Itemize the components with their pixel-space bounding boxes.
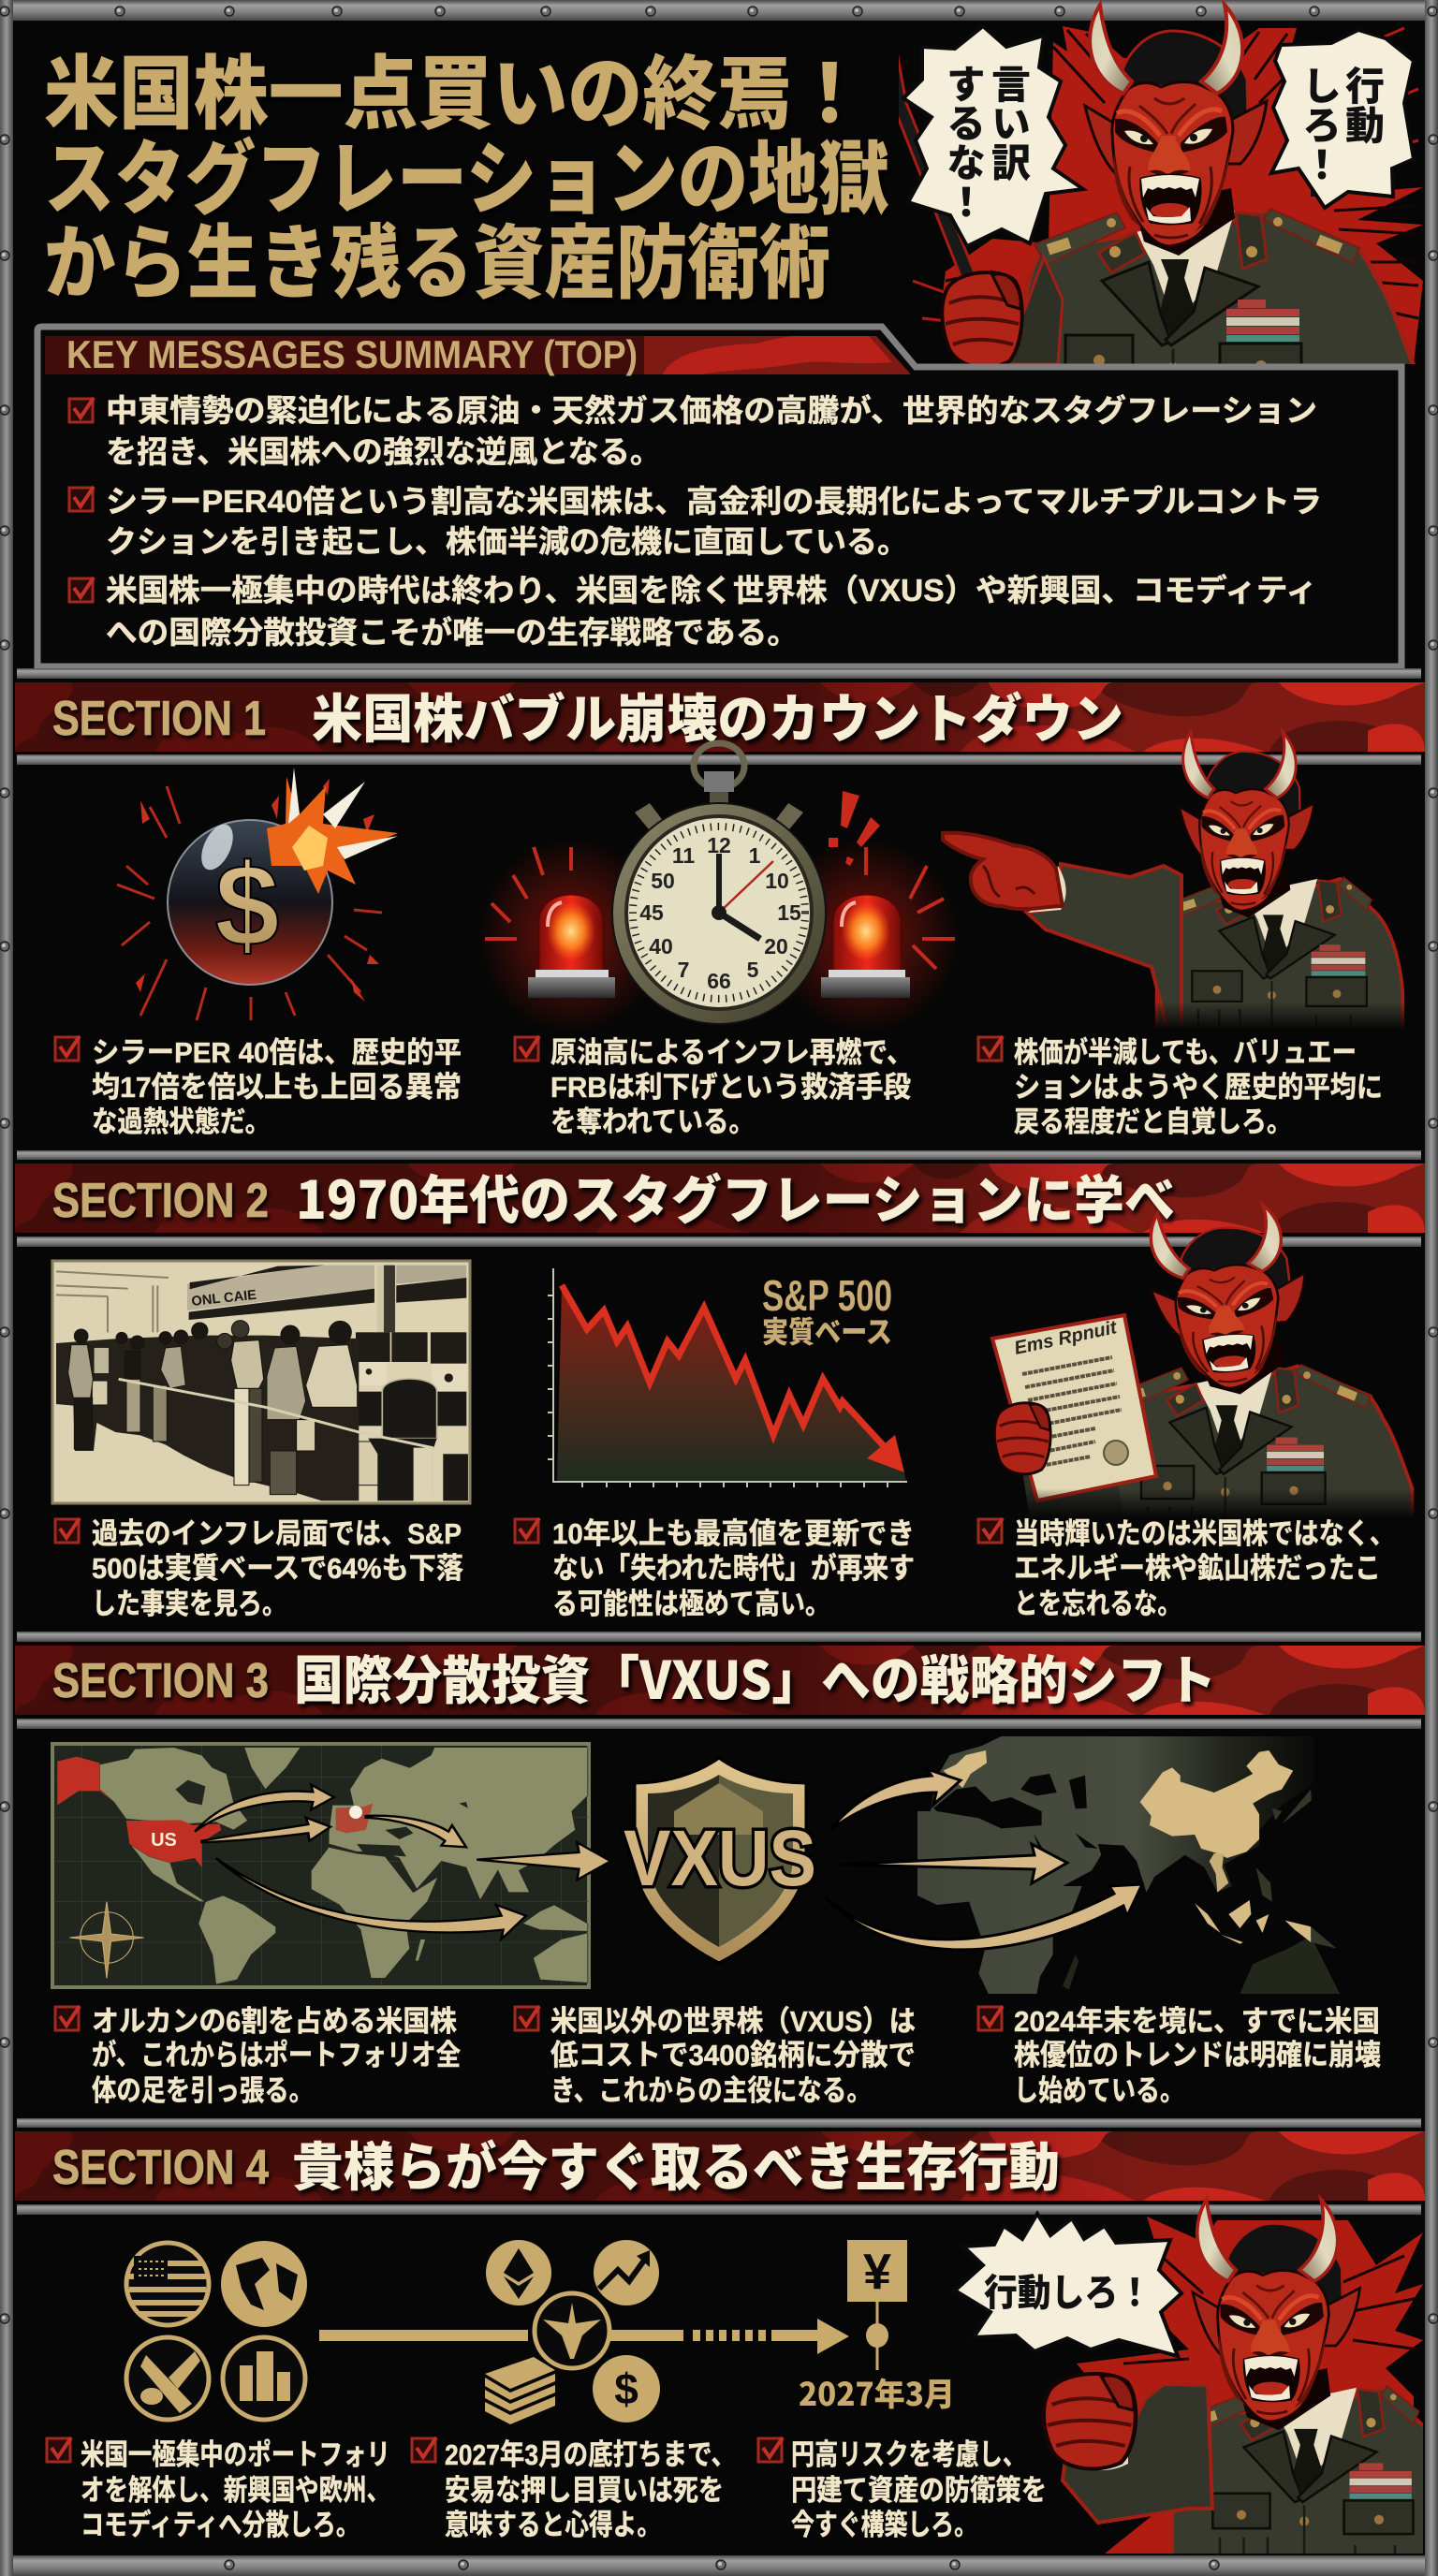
- bullet: shiller: 均17倍を倍以上も上回る異常: [92, 1071, 462, 1104]
- bullet: yen risk: [758, 2437, 1047, 2541]
- section 4 header: SECTION 4: [52, 2141, 269, 2195]
- bullet: break concentration: 米国一極集中のポートフォリ: [81, 2438, 390, 2471]
- bullet: lost era: [515, 1517, 915, 1620]
- section 2 header: 1970年代のスタグフレーションに学べ: [296, 1159, 1175, 1235]
- seas: [917, 1736, 1098, 1855]
- hands: [719, 861, 773, 913]
- seas: [175, 1780, 468, 1856]
- bullet: break concentration: コモディティへ分散しろ。: [81, 2509, 360, 2541]
- red burst: [941, 26, 1423, 364]
- section 2 header: [15, 1150, 1425, 1247]
- icon: cash stack: [485, 2357, 555, 2424]
- bullet: valuation: 戻る程度だと自覚しろ。: [1014, 1105, 1292, 1138]
- continents: [99, 1748, 588, 1984]
- bullet: all-country: 体の足を引っ張る。: [92, 2074, 314, 2107]
- VXUS shield: [624, 1758, 816, 1963]
- rope barrier: [118, 1378, 434, 1448]
- pump counter: [353, 1332, 468, 1500]
- title: スタグフレーションの地獄: [44, 113, 889, 230]
- bullet: VXUS: [515, 2005, 916, 2107]
- summary heading tab: KEY MESSAGES SUMMARY (TOP): [66, 332, 638, 376]
- bottom fade: [1026, 1489, 1414, 1518]
- dial numbers: 12: [707, 833, 731, 857]
- title: [44, 28, 889, 315]
- bullet: 2024 trend: 2024年末を境に、すでに米国: [1014, 2005, 1380, 2038]
- message 3: への国際分散投資こそが唯一の生存戦略である。: [106, 615, 799, 650]
- icon: buildings: [223, 2337, 305, 2420]
- bullet: all-country: が、これからはポートフォリオ全: [92, 2039, 461, 2071]
- section 4 bullet texts: [47, 2437, 1047, 2541]
- bullet: valuation: 株価が半減しても、バリュエー: [1014, 1036, 1357, 1069]
- icon: central hub: [535, 2293, 609, 2368]
- bullet: 64 percent: した事実を見ろ。: [92, 1588, 286, 1620]
- message 3: [69, 573, 1317, 650]
- station signage: ONL CAIE: [191, 1288, 257, 1310]
- dial numbers: 45: [639, 900, 664, 925]
- title: から生き残る資産防衛術: [44, 198, 830, 315]
- dial numbers: [639, 833, 801, 993]
- devil pointing: [941, 727, 1404, 1028]
- bullet: VXUS: 低コストで3400銘柄に分散で: [550, 2039, 916, 2071]
- bullet: lost era: る可能性は極めて高い。: [552, 1588, 830, 1620]
- bullet: valuation: [978, 1036, 1383, 1138]
- bullet: lost era: ない「失われた時代」が再来す: [552, 1552, 915, 1585]
- icon: yen marker with date: ¥: [863, 2244, 891, 2300]
- bullet: bottom in March 2027: 2027年3月の底打ちまで、: [445, 2438, 736, 2471]
- speech bubble: act: 行動: [1337, 66, 1393, 144]
- bullet: 64 percent: 過去のインフレ局面では、S&P: [92, 1517, 462, 1550]
- siren right: [772, 838, 960, 1034]
- dial numbers: 15: [777, 900, 801, 925]
- land: [917, 1736, 1314, 1994]
- document: [992, 1315, 1156, 1500]
- bullet: energy stocks: [978, 1517, 1395, 1620]
- devil figure: [1022, 0, 1416, 364]
- bullet: yen risk: 円建て資産の防衛策を: [791, 2474, 1047, 2507]
- devil commander with baton: [899, 0, 1423, 364]
- photo: 1970s gas queue: [52, 1261, 470, 1503]
- arrow head: [867, 1435, 904, 1472]
- bullet: 2024 trend: し始めている。: [1014, 2074, 1184, 2107]
- icon: tools: [126, 2337, 209, 2420]
- document: Ems Rpnuit: [1012, 1317, 1120, 1359]
- section 1 header: 米国株バブル崩壊のカウントダウン: [312, 678, 1123, 754]
- bullet: all-country: [55, 2005, 461, 2107]
- bullet: yen risk: 今すぐ構築しろ。: [791, 2509, 977, 2541]
- devil with document: [990, 1200, 1414, 1516]
- fist: [942, 272, 1022, 367]
- icon group: diversification hub: [485, 2240, 660, 2424]
- dial numbers: 50: [651, 869, 675, 893]
- dial numbers: 11: [672, 843, 695, 868]
- US highlighted: [57, 1757, 373, 1867]
- bullet: break concentration: オを解体し、新興国や欧州、: [81, 2474, 390, 2507]
- timeline arrow: [319, 2319, 849, 2354]
- icon: dollar coin: $: [614, 2364, 638, 2413]
- section 2 bullet texts: [55, 1517, 1395, 1620]
- dial numbers: 10: [765, 869, 789, 893]
- chart label: [762, 1271, 892, 1352]
- chart label: 実質ベース: [762, 1309, 892, 1352]
- message 2: クションを引き起こし、株価半減の危機に直面している。: [106, 524, 908, 559]
- speech bubble: act: しろ！: [1294, 66, 1350, 183]
- chart: S&P 500 real decline: [548, 1268, 907, 1487]
- section 3 header: SECTION 3: [52, 1654, 269, 1708]
- message 2: シラーPER40倍という割高な米国株は、高金利の長期化によってマルチプルコントラ: [106, 484, 1322, 519]
- dark Asia map: [917, 1736, 1340, 1994]
- queue of people: [68, 1321, 358, 1495]
- bullet: bottom in March 2027: 安易な押し目買いは死を: [445, 2474, 724, 2507]
- bullet: 64 percent: 500は実質ベースで64%も下落: [92, 1552, 463, 1585]
- icon: growth chart: [594, 2240, 659, 2305]
- watch case: [694, 743, 744, 788]
- raised fist: [1044, 2374, 1136, 2468]
- bullet: energy stocks: とを忘れるな。: [1014, 1588, 1181, 1620]
- exclamation marks: [829, 791, 880, 866]
- bullet: shiller: な過熱状態だ。: [92, 1105, 271, 1138]
- icon: globe: [223, 2243, 305, 2325]
- bullet: FRB: を奪われている。: [550, 1105, 755, 1138]
- message 1: 中東情勢の緊迫化による原油・天然ガス価格の高騰が、世界的なスタグフレーション: [106, 393, 1317, 428]
- map: world from US: US: [151, 1830, 177, 1851]
- devil with fist and shout: [1044, 2200, 1438, 2576]
- VXUS shield: VXUS: [624, 1814, 816, 1902]
- section 1 header: [15, 668, 1425, 765]
- chart label: S&P 500: [762, 1271, 892, 1320]
- sleeve: [1004, 257, 1063, 364]
- bullet: FRB: 原油高によるインフレ再燃で、: [550, 1036, 913, 1069]
- icon: dollar coin: [593, 2355, 660, 2422]
- bullet: FRB: FRBは利下げという救済手段: [550, 1071, 911, 1104]
- title: 米国株一点買いの終焉！: [44, 28, 867, 145]
- icon: dollar bubble bursting: [117, 768, 398, 1020]
- dial numbers: 1: [749, 843, 761, 868]
- bullet: energy stocks: 当時輝いたのは米国株ではなく、: [1014, 1517, 1395, 1550]
- bullet: bottom in March 2027: 意味すると心得よ。: [445, 2509, 661, 2541]
- panel: key messages: [37, 327, 1401, 666]
- message 2: [69, 484, 1322, 559]
- bullet: shiller: シラーPER 40倍は、歴史的平: [92, 1036, 462, 1069]
- message 1: [69, 393, 1317, 469]
- bullet: VXUS: き、これからの主役になる。: [550, 2074, 872, 2107]
- bullet: VXUS: 米国以外の世界株（VXUS）は: [550, 2005, 916, 2038]
- hand: [994, 1403, 1050, 1474]
- bullet: energy stocks: エネルギー株や鉱山株だったこ: [1014, 1552, 1381, 1585]
- bullet: all-country: オルカンの6割を占める米国株: [92, 2005, 457, 2038]
- dial numbers: 20: [764, 934, 788, 959]
- dial numbers: 40: [649, 934, 673, 959]
- dial numbers: 66: [707, 969, 731, 993]
- message 3: 米国株一極集中の時代は終わり、米国を除く世界株（VXUS）や新興国、コモディティ: [106, 573, 1317, 607]
- section 3 header: 国際分散投資「VXUS」への戦略的シフト: [294, 1639, 1216, 1715]
- icon group: portfolio circles: [126, 2243, 305, 2420]
- arrows to Asia: [826, 1769, 1142, 1950]
- icon: US flag: [126, 2243, 209, 2325]
- icon: yen marker with date: 2027年3月: [799, 2369, 955, 2415]
- section 2 header: SECTION 2: [52, 1174, 269, 1228]
- raised arm: [1063, 2384, 1212, 2523]
- baton: [899, 54, 976, 276]
- message 1: を招き、米国株への強烈な逆風となる。: [106, 434, 661, 469]
- crowd backing: [56, 1336, 359, 1500]
- section 1 header: SECTION 1: [52, 692, 266, 746]
- red burst: [1077, 2217, 1423, 2554]
- Madagascar and Australia: [1063, 1936, 1340, 1994]
- speech bubble: excuses: [903, 26, 1083, 246]
- pointing hand: [943, 833, 1063, 909]
- speech bubble: act now: 行動しろ！: [984, 2262, 1152, 2317]
- section 3 header: [15, 1632, 1425, 1729]
- section 3 bullet texts: [55, 2005, 1381, 2107]
- bullet: 64 percent: [55, 1517, 463, 1620]
- map: world from US: [52, 1744, 610, 1987]
- map arrows: [195, 1785, 610, 1939]
- axes: [553, 1268, 907, 1482]
- section 4 header: 貴様らが今すぐ取るべき生存行動: [292, 2126, 1060, 2202]
- speech bubble: excuses: 言い訳: [983, 64, 1039, 182]
- compass: [69, 1902, 144, 1978]
- bullet: valuation: ションはようやく歴史的平均に: [1014, 1071, 1383, 1104]
- grid: [54, 1746, 590, 1986]
- section 4 header: [15, 2118, 1425, 2215]
- speech bubble: excuses: するな！: [938, 64, 994, 221]
- bullet: yen risk: 円高リスクを考慮し、: [791, 2438, 1026, 2471]
- bullet: break concentration: [47, 2437, 390, 2541]
- dial numbers: 7: [678, 958, 689, 982]
- speech bubble: act: [1271, 30, 1414, 208]
- bullet: bottom in March 2027: [412, 2437, 736, 2541]
- icon: stopwatch with sirens: [477, 743, 960, 1034]
- icon: ethereum: [486, 2240, 551, 2305]
- sleeve: [1022, 1475, 1121, 1516]
- bottom fade: [1155, 1003, 1404, 1030]
- pointing arm: [1027, 864, 1181, 1030]
- bullet: shiller: [55, 1036, 462, 1138]
- bullet: lost era: 10年以上も最高値を更新でき: [552, 1517, 915, 1550]
- highlighted China and neighbours: [1140, 1750, 1293, 1858]
- speech bubble: act now: [955, 2214, 1181, 2356]
- bullet: 2024 trend: [978, 2005, 1381, 2107]
- area: [557, 1285, 906, 1482]
- decline line: [562, 1285, 886, 1448]
- icon: yen marker with date: [799, 2240, 955, 2415]
- dial numbers: 5: [747, 958, 759, 982]
- bullet: FRB: [515, 1036, 913, 1138]
- section 1 bullet texts: [55, 1036, 1383, 1138]
- siren left: [477, 838, 665, 1034]
- bullet: 2024 trend: 株優位のトレンドは明確に崩壊: [1014, 2039, 1381, 2071]
- station signage: [56, 1266, 466, 1332]
- icon: dollar bubble bursting: $: [215, 842, 279, 971]
